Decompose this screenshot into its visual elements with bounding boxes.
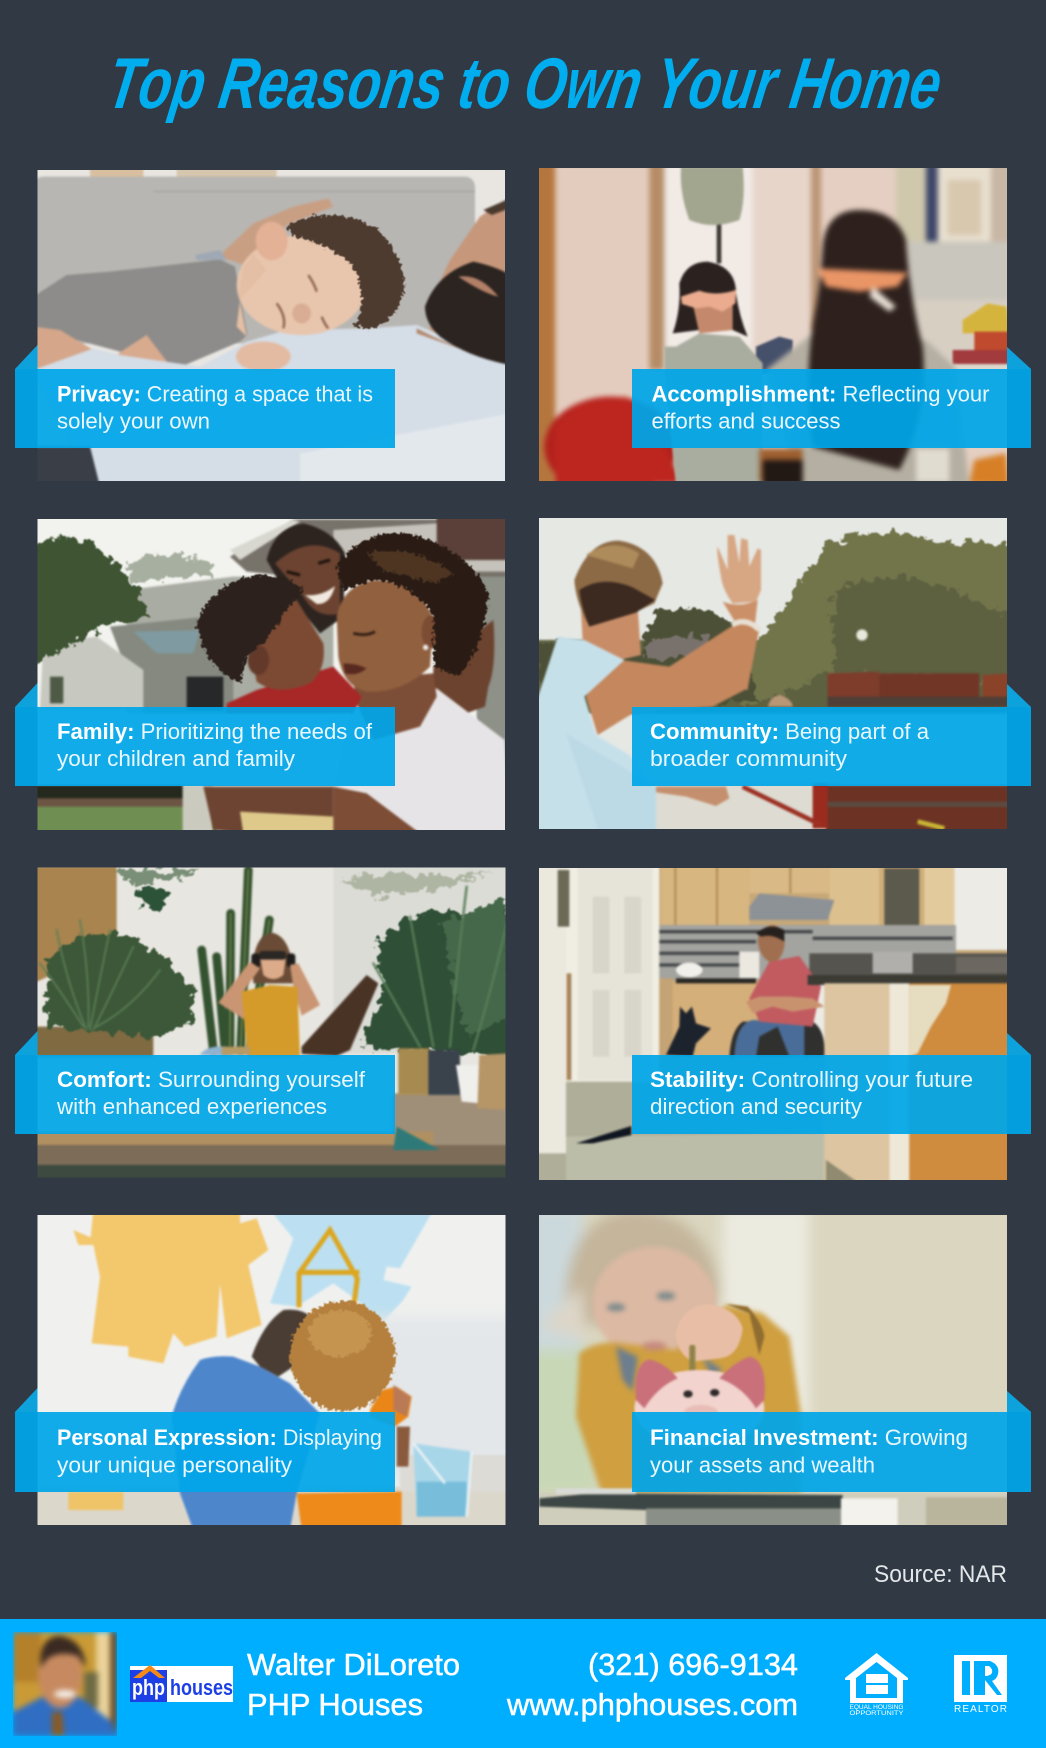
photo: woman waving (533, 513, 1016, 837)
company logo: php houses: php (132, 1675, 165, 1700)
agent portrait (13, 1632, 117, 1736)
banner: financial investment (632, 1391, 1031, 1492)
banner: privacy (15, 345, 395, 448)
leaves detail (40, 870, 507, 1050)
banner: family: your children and family (57, 746, 295, 771)
icon: equal housing opportunity (845, 1653, 908, 1717)
photo: girl with piggy bank (539, 1215, 1007, 1525)
company logo: php houses (130, 1665, 233, 1702)
photo: woman with headphones among plants (30, 860, 513, 1183)
card: financial investment (526, 1200, 1031, 1533)
photo: couple in front of painted wall (38, 1215, 506, 1525)
card: family (15, 513, 513, 837)
card: community (533, 513, 1031, 837)
card: personal expression (15, 1208, 533, 1532)
banner: personal expression: your unique personality (57, 1452, 292, 1478)
card: stability (533, 860, 1031, 1183)
banner: comfort: Comfort: Surrounding yourself (57, 1067, 366, 1092)
banner: financial investment: Financial Investment: Growing (650, 1425, 968, 1450)
phone number: (321) 696-9134 (588, 1648, 798, 1682)
agent name: Walter DiLoreto (247, 1648, 460, 1682)
banner: personal expression (15, 1388, 395, 1492)
source note: Source: NAR (874, 1561, 1007, 1588)
banner: comfort: with enhanced experiences (56, 1094, 327, 1119)
banner: community: Community: Being part of a (650, 719, 930, 744)
card: privacy (15, 163, 513, 487)
banner: community (632, 684, 1031, 786)
photo: man in wheelchair in kitchen (533, 860, 1016, 1183)
banner: family (15, 683, 395, 786)
photo: boy sleeping on father (30, 163, 513, 487)
banner: financial investment: your assets and wealth (650, 1452, 875, 1478)
icon: equal housing opportunity: EQUAL HOUSING (850, 1704, 904, 1711)
banner: accomplishment (632, 347, 1031, 448)
banner: family: Family: Prioritizing the needs of (57, 719, 373, 744)
icon: realtor (954, 1655, 1007, 1715)
card: comfort (15, 860, 513, 1183)
company logo: php houses: houses (170, 1675, 233, 1700)
photo: mother with two children (30, 513, 513, 837)
icon: realtor: REALTOR (954, 1704, 1007, 1715)
banner: accomplishment: Accomplishment: Reflecting your (652, 382, 990, 406)
banner: accomplishment: efforts and success (652, 408, 840, 434)
website: www.phphouses.com (506, 1688, 798, 1722)
photo: girls with masks (533, 163, 1016, 497)
company name: PHP Houses (247, 1688, 423, 1722)
banner: stability (632, 1033, 1031, 1134)
footer bar (0, 1619, 1046, 1748)
banner: community: broader community (650, 746, 847, 771)
banner: stability: Stability: Controlling your future (650, 1067, 973, 1092)
banner: privacy: solely your own (57, 408, 210, 434)
banner: personal expression: Personal Expression: Displaying (57, 1425, 382, 1450)
card: accomplishment (533, 163, 1031, 497)
banner: comfort (15, 1031, 395, 1134)
icon: equal housing opportunity: OPPORTUNITY (850, 1710, 904, 1717)
banner: privacy: Privacy: Creating a space that is (57, 382, 373, 406)
banner: stability: direction and security (650, 1094, 862, 1119)
